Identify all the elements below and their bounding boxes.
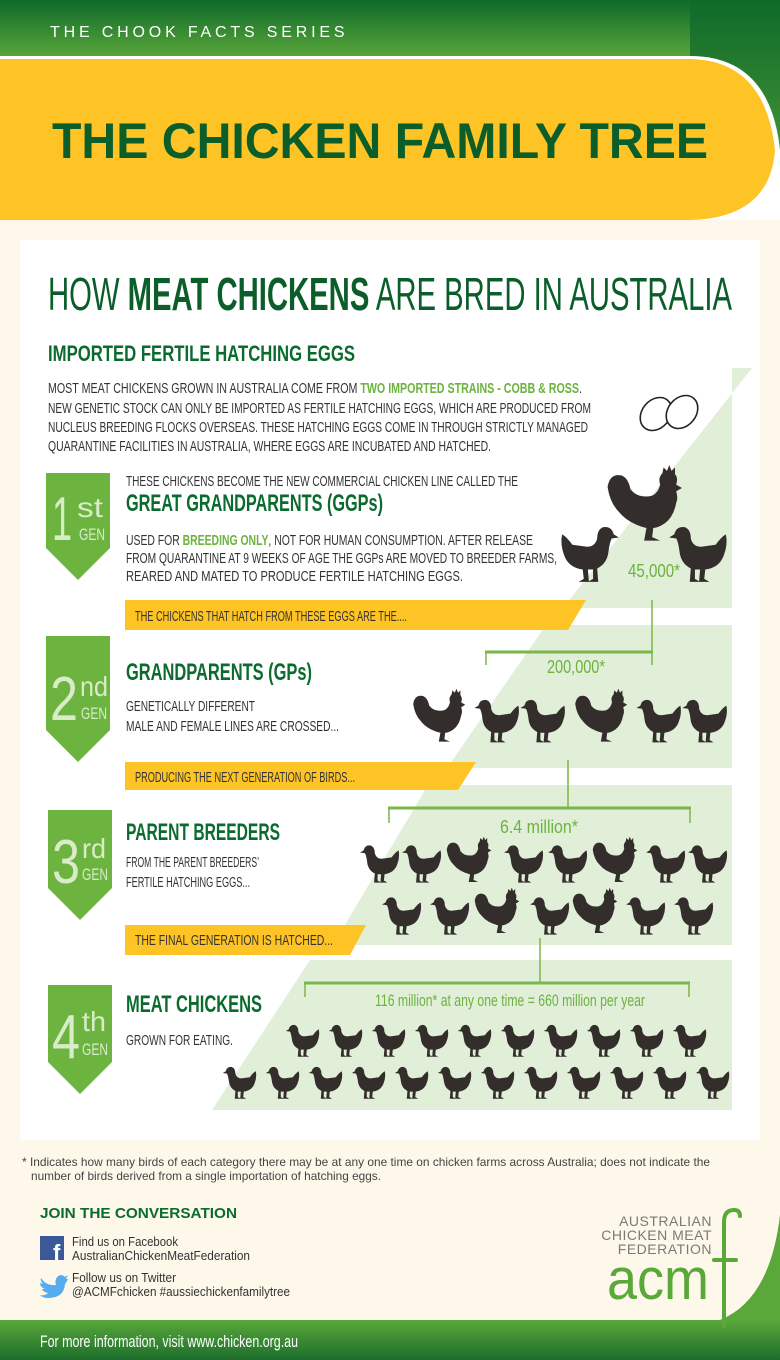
icon: twitter: [40, 1275, 68, 1298]
badge: 4th gen: GEN: [82, 1040, 108, 1059]
footer: For more information, visit www.chicken.org.au: [40, 1332, 298, 1351]
yellow bar 1: THE CHICKENS THAT HATCH FROM THESE EGGS ARE THE....: [135, 609, 407, 625]
title: THE CHICKEN FAMILY TREE: [52, 113, 708, 169]
icon: facebook: f: [53, 1240, 61, 1265]
join the conversation: JOIN THE CONVERSATION: [40, 1205, 237, 1222]
yellow bar 3: [125, 925, 366, 955]
badge: 4th gen: 4: [52, 1003, 80, 1072]
gen1 text: [126, 474, 557, 585]
badge: 4th gen: [48, 985, 112, 1094]
twitter text: Follow us on Twitter: [72, 1271, 176, 1285]
gen4 text: GROWN FOR EATING.: [126, 1033, 233, 1049]
footnote: number of birds derived from a single importation of hatching eggs.: [31, 1169, 381, 1183]
gen2 text: GENETICALLY DIFFERENT: [126, 699, 255, 715]
gen3 text: PARENT BREEDERS: [126, 819, 280, 846]
logo: acmf: CHICKEN MEAT: [601, 1227, 712, 1243]
green pyramid background: [212, 368, 752, 1110]
twitter text: @ACMFchicken #aussiechickenfamilytree: [72, 1285, 290, 1299]
gen1 text: GREAT GRANDPARENTS (GGPs): [126, 490, 383, 517]
yellow bar 3: THE FINAL GENERATION IS HATCHED...: [135, 933, 333, 949]
logo: acmf: acm: [607, 1247, 709, 1312]
header band: [0, 0, 780, 240]
gen3 text: FROM THE PARENT BREEDERS’: [126, 855, 259, 871]
gen1 text: USED FOR BREEDING ONLY, NOT FOR HUMAN CONSUMPTION. AFTER RELEASE: [126, 533, 533, 549]
facebook text: Find us on Facebook: [72, 1235, 179, 1249]
series label: THE CHOOK FACTS SERIES: [50, 24, 348, 41]
footnote: [22, 1155, 710, 1183]
facebook text: [72, 1235, 250, 1263]
footer: [0, 1215, 780, 1360]
section heading: imported eggs: IMPORTED FERTILE HATCHING EGGS: [48, 341, 355, 366]
count 116 million: 116 million* at any one time = 660 million per year: [375, 991, 645, 1010]
yellow bar 2: [125, 762, 476, 790]
icon: facebook: [40, 1236, 64, 1265]
yellow bar 1: [125, 600, 586, 630]
gen3 text: FERTILE HATCHING EGGS...: [126, 875, 250, 891]
intro paragraph: QUARANTINE FACILITIES IN AUSTRALIA, WHERE EGGS ARE INCUBATED AND HATCHED.: [48, 439, 491, 455]
gen1 text: FROM QUARANTINE AT 9 WEEKS OF AGE THE GGPs ARE MOVED TO BREEDER FARMS,: [126, 551, 557, 567]
intro paragraph: [48, 381, 591, 455]
logo: acmf: FEDERATION: [618, 1241, 712, 1257]
gen2 birds: [413, 689, 727, 742]
twitter text: [72, 1271, 290, 1299]
gen3 text: [126, 819, 280, 891]
connector 2: [388, 760, 691, 823]
count 6.4 million: 6.4 million*: [500, 817, 578, 837]
facebook text: AustralianChickenMeatFederation: [72, 1249, 250, 1263]
badge: 3rd gen: 3: [52, 828, 80, 897]
badge: 3rd gen: GEN: [82, 865, 108, 884]
gen2 text: MALE AND FEMALE LINES ARE CROSSED...: [126, 719, 339, 735]
gen2 text: [126, 659, 339, 735]
gen4 text: MEAT CHICKENS: [126, 991, 262, 1018]
badge: 1st gen: [46, 473, 110, 580]
intro paragraph: MOST MEAT CHICKENS GROWN IN AUSTRALIA COME FROM TWO IMPORTED STRAINS - COBB & ROSS.: [48, 381, 582, 397]
connector 1: [485, 600, 653, 665]
badge: 1st gen: GEN: [79, 525, 105, 544]
gen2 text: GRANDPARENTS (GPs): [126, 659, 312, 686]
logo: acmf: AUSTRALIAN: [619, 1213, 712, 1229]
badge: 3rd gen: rd: [82, 833, 106, 864]
gen3 birds: [360, 837, 727, 935]
badge: 1st gen: st: [77, 492, 103, 523]
badge: 1st gen: 1: [52, 485, 72, 554]
yellow bar 2: PRODUCING THE NEXT GENERATION OF BIRDS...: [135, 770, 355, 786]
badge: 4th gen: th: [82, 1006, 106, 1037]
badge: 2nd gen: 2: [50, 665, 78, 734]
footnote: * Indicates how many birds of each category there may be at any one time on chicken farms across Australia; does not indicate the: [22, 1155, 710, 1169]
icon: eggs: [634, 389, 704, 437]
gen1 text: THESE CHICKENS BECOME THE NEW COMMERCIAL CHICKEN LINE CALLED THE: [126, 474, 518, 490]
gen1 birds: [561, 465, 727, 582]
connector 3: [304, 938, 690, 997]
main panel: [20, 240, 760, 1140]
badge: 2nd gen: nd: [80, 671, 108, 702]
gen4 text: [126, 991, 262, 1049]
count 200,000: 200,000*: [547, 657, 605, 677]
badge: 2nd gen: [46, 636, 110, 762]
logo: acmf: [601, 1210, 740, 1326]
count 45,000: 45,000*: [628, 561, 680, 581]
gen1 text: REARED AND MATED TO PRODUCE FERTILE HATCHING EGGS.: [126, 569, 463, 585]
gen4 birds: [223, 1025, 729, 1099]
badge: 3rd gen: [48, 810, 112, 920]
badge: 2nd gen: GEN: [81, 704, 107, 723]
